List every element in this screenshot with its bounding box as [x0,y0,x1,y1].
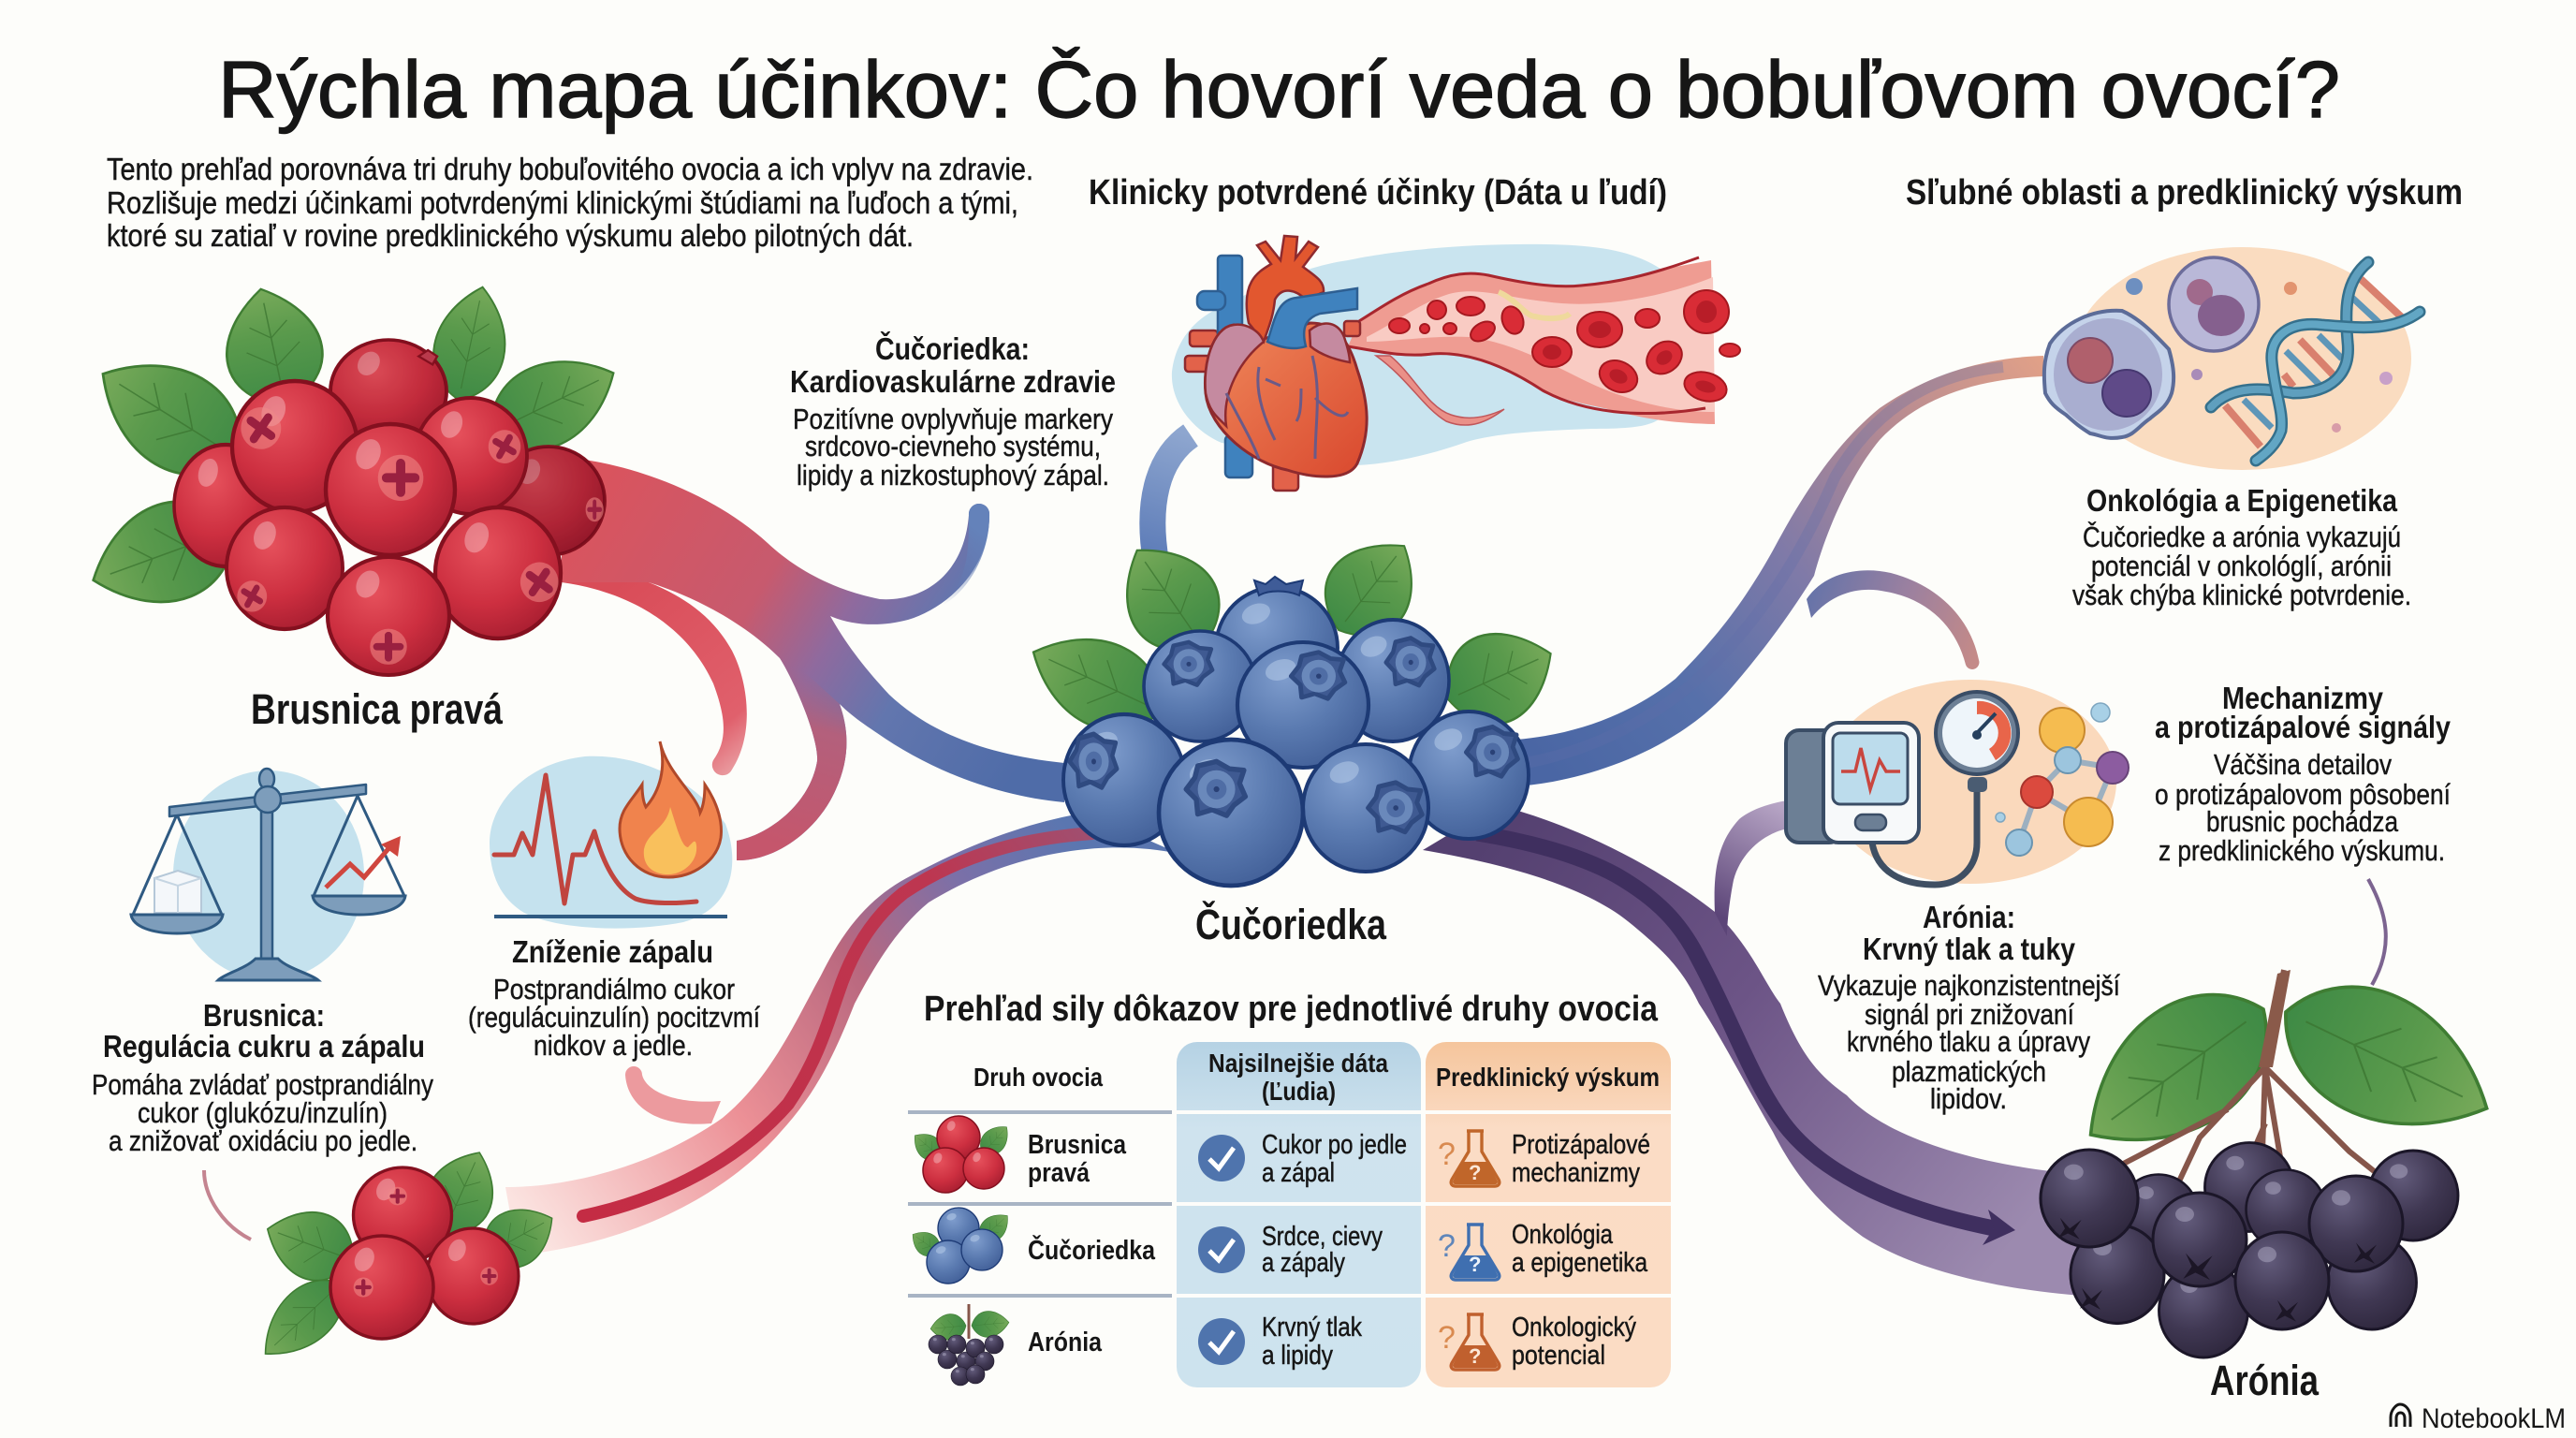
text block: blueberry cardiovascular [790,330,1116,492]
flask icons: ? [1438,1137,1456,1172]
text block: aronia blood pressure: signál pri znižovaní [1865,998,2074,1031]
illustration: oncology cells and DNA [2044,247,2420,470]
preclinical cell text: Onkologický [1512,1313,1636,1343]
illustration: blood pressure monitor and molecules [1786,680,2129,885]
text block: cranberry sugar regulation: cukor (glukózu/inzulín) [138,1096,388,1129]
check icons [1198,1135,1245,1365]
header: fruit type: Druh ovocia [973,1063,1103,1092]
header: preclinical research: Predklinický výskum [1436,1063,1660,1092]
text block: oncology: Onkológia a Epigenetika [2086,483,2398,518]
text block: oncology: Čučoriedke a arónia vykazujú [2083,521,2401,553]
evidence table [906,990,1671,1387]
illustration: blueberry cluster [1016,520,1569,886]
preclinical cell text: Onkológia [1512,1220,1614,1250]
text block: inflammation reduction: Zníženie zápalu [512,934,713,969]
text block: cranberry sugar regulation: Brusnica: [203,998,325,1033]
flow: blueberry to aronia [1423,800,2097,1297]
column: human data [1177,1042,1421,1387]
illustration: inflammation pulse and flame [490,741,732,929]
text block: aronia blood pressure: krvného tlaku a úpravy [1847,1025,2090,1058]
text block: inflammation reduction: nidkov a jedle. [534,1029,693,1062]
illustration: aronia branch [2041,956,2513,1357]
intro text: ktoré su zatiaľ v rovine predklinického výskumu alebo pilotných dát. [107,218,914,253]
flow: blueberry to oncology [1516,356,2043,785]
text block: oncology: potenciál v onkológlí, arónii [2091,550,2392,582]
text block: aronia blood pressure: Arónia: [1923,900,2015,934]
row label: cranberry: Brusnica [1028,1130,1127,1160]
text block: blueberry cardiovascular: Čučoriedka: [875,330,1030,366]
preclinical cell text: mechanizmy [1512,1158,1640,1188]
flow: small cranberry to blueberry [505,813,1179,1255]
text block: mechanisms: a protizápalové signály [2155,710,2452,744]
row icon: blueberry [906,1207,1016,1284]
connector: mechanisms note [2368,879,2386,985]
human data cell text: Krvný tlak [1262,1313,1362,1343]
row label: blueberry: Čučoriedka [1028,1234,1156,1266]
text block: blueberry cardiovascular: lipidy a nizkostuphový zápal. [797,459,1109,492]
text block: oncology: však chýba klinické potvrdenie. [2072,579,2411,611]
human data cell text: a zápal [1262,1158,1335,1188]
text block: inflammation reduction: Postprandiálmo cukor [493,973,735,1005]
text block: aronia blood pressure: Krvný tlak a tuky [1863,932,2076,966]
table title: Prehľad sily dôkazov pre jednotlivé druhy ovocia [924,990,1659,1029]
text block: inflammation reduction [468,934,760,1062]
heading: clinically confirmed effects: Klinicky potvrdené účinky (Dáta u ľudí) [1089,173,1667,213]
text block: blueberry cardiovascular: Pozitívne ovplyvňuje markery [793,403,1113,435]
label: blueberry: Čučoriedka [1195,901,1387,948]
flask icons: ? [1469,1161,1481,1184]
text block: cranberry sugar regulation [92,998,433,1157]
header: strongest data: (Ľudia) [1262,1077,1336,1106]
row label: cranberry: pravá [1028,1158,1090,1188]
human data cell text: a zápaly [1262,1248,1345,1278]
text block: cranberry sugar regulation: Pomáha zvládať postprandiálny [92,1068,433,1101]
preclinical cell text [1512,1130,1650,1371]
illustration: cranberry cluster [77,279,631,675]
text block: mechanisms [2155,681,2452,867]
connector: scales note [204,1170,251,1240]
text block: aronia blood pressure: plazmatických [1892,1055,2046,1088]
text block: blueberry cardiovascular: Kardiovaskulárne zdravie [790,364,1116,399]
text block: mechanisms: brusnic pochádza [2206,805,2399,838]
intro text: Rozlišuje medzi účinkami potvrdenými klinickými štúdiami na ľuďoch a tými, [107,185,1018,220]
text block: cranberry sugar regulation: a znižovať oxidáciu po jedle. [109,1124,417,1157]
flask icons: ? [1469,1253,1481,1276]
heading: promising areas: Sľubné oblasti a predklinický výskum [1906,173,2463,213]
human data cell text: Srdce, cievy [1262,1222,1383,1252]
text block: blueberry cardiovascular: srdcovo-cievneho systému, [805,430,1101,462]
text block: mechanisms: o protizápalovom pôsobení [2155,778,2451,811]
flask icons: ? [1438,1320,1456,1356]
flask icons: ? [1469,1344,1481,1368]
text block: aronia blood pressure: lipidov. [1930,1082,2007,1115]
intro text: Tento prehľad porovnáva tri druhy bobuľovitého ovocia a ich vplyv na zdravie. [107,152,1033,186]
row label: aronia: Arónia [1028,1328,1103,1357]
label: cranberry: Brusnica pravá [251,685,504,733]
title: Rýchla mapa účinkov: Čo hovorí veda o bobuľovom ovocí? [218,46,2340,135]
illustration: heart and blood vessel [1172,236,1740,491]
text block: oncology [2072,483,2411,611]
text block: mechanisms: Váčšina detailov [2214,748,2392,781]
flask icons [1438,1131,1500,1370]
header: strongest data [1208,1049,1388,1106]
text block: aronia blood pressure [1818,900,2120,1115]
human data cell text: a lipidy [1262,1341,1333,1371]
column: preclinical [1426,1042,1671,1387]
preclinical cell text: a epigenetika [1512,1248,1648,1278]
preclinical cell text: Protizápalové [1512,1130,1650,1160]
flow: blueberry to heart [1152,435,1191,562]
flask icons: ? [1438,1228,1456,1264]
preclinical cell text: potencial [1512,1341,1605,1371]
text block: mechanisms: z predklinického výskumu. [2159,834,2445,867]
text block: cranberry sugar regulation: Regulácia cukru a zápalu [103,1029,425,1064]
intro text [107,152,1033,253]
text block: aronia blood pressure: Vykazuje najkonzistentnejší [1818,969,2120,1002]
illustration: scales [131,769,405,980]
header: strongest data: Najsilnejšie dáta [1208,1049,1388,1078]
row icon: aronia [929,1304,1010,1386]
flow: cranberry to blueberry [562,457,1064,860]
text block: inflammation reduction: (regulácuinzulín) pocitzvmí [468,1001,760,1034]
human data cell text: Cukor po jedle [1262,1130,1407,1160]
illustration: small cranberries [247,1139,565,1373]
text block: mechanisms: Mechanizmy [2222,681,2384,715]
row label: cranberry [1028,1130,1127,1188]
row icon: cranberry [907,1116,1016,1193]
label: aronia: Arónia [2210,1357,2320,1404]
human data cell text [1262,1130,1407,1371]
